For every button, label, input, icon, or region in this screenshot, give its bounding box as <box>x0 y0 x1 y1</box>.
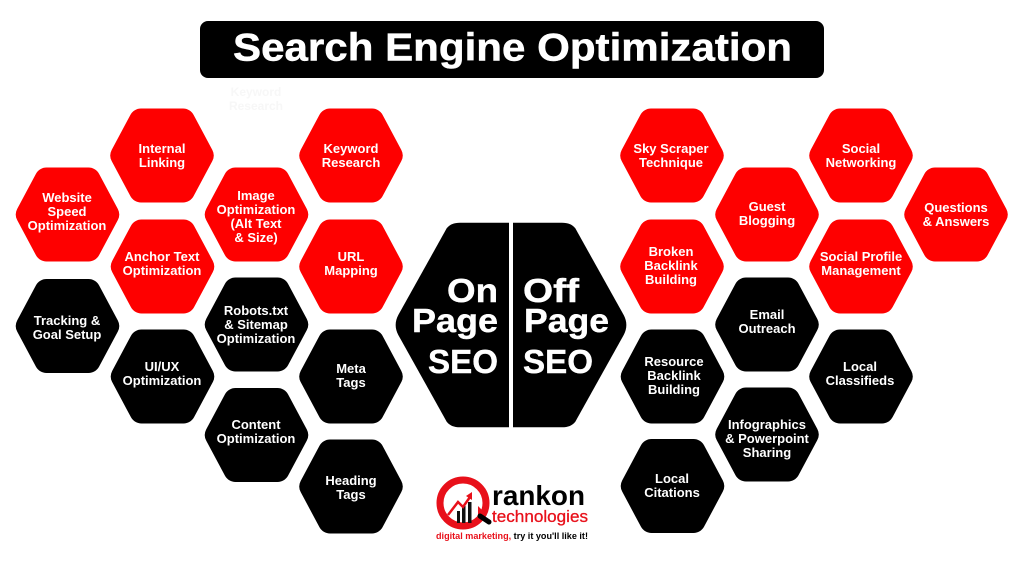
faint ghost text: Keyword <box>231 85 281 99</box>
hexagon: Questions & Answers: Questions <box>924 200 988 215</box>
title banner: Search Engine Optimization <box>233 26 792 70</box>
hexagon: Anchor Text Optimization <box>123 232 202 302</box>
hexagon: Social Networking: Networking <box>826 155 896 170</box>
center: Off Page SEO half hexagon <box>513 223 626 427</box>
hexagon: Meta Tags: Meta <box>336 361 367 376</box>
logo subtitle: technologies <box>492 508 588 526</box>
hexagon: Image Optimization: & Size) <box>234 230 278 245</box>
hexagon: Tracking & Goal Setup <box>28 291 107 361</box>
hexagon: Image Optimization: Image <box>237 188 275 203</box>
hexagon: Sky Scraper Technique <box>632 120 712 190</box>
center: On Page SEO half hexagon: Page <box>412 302 498 339</box>
hexagon: Infographics & Powerpoint Sharing: Sharing <box>743 445 791 460</box>
hexagon: Anchor Text Optimization: Optimization <box>123 263 201 278</box>
center: On Page SEO half hexagon: SEO <box>428 343 498 380</box>
hexagon: Social Profile Management <box>820 232 902 302</box>
center: On Page SEO half hexagon <box>396 223 509 427</box>
hexagon: Broken Backlink Building: Broken <box>649 244 693 259</box>
hexagon: UI/UX Optimization: Optimization <box>123 373 201 388</box>
hexagon: Resource Backlink Building <box>633 342 712 412</box>
hexagon: Guest Blogging <box>727 180 807 250</box>
hexagon: Social Profile Management: Management <box>821 263 901 278</box>
hexagon: Social Profile Management: Social Profile <box>820 249 902 264</box>
hexagon: Anchor Text Optimization: Anchor Text <box>125 249 200 264</box>
hexagon: Website Speed Optimization: Speed <box>47 204 87 219</box>
hexagon: Resource Backlink Building: Resource <box>644 354 704 369</box>
faint ghost text <box>229 85 283 113</box>
hexagon: Image Optimization: Optimization <box>217 202 295 217</box>
hexagon: Website Speed Optimization <box>28 180 107 250</box>
hexagon: Robots.txt & Sitemap Optimization <box>217 290 296 360</box>
hexagon: UI/UX Optimization <box>123 342 202 412</box>
center: On Page SEO half hexagon: On <box>447 272 498 309</box>
hexagon: Questions & Answers: & Answers <box>923 214 989 229</box>
center: Off Page SEO half hexagon: Page <box>524 302 609 339</box>
hexagon: Image Optimization <box>217 180 296 250</box>
hexagon: Meta Tags: Tags <box>336 375 366 390</box>
hexagon: Tracking & Goal Setup: Goal Setup <box>33 327 101 342</box>
hexagon: URL Mapping: Mapping <box>324 263 378 278</box>
hexagon: Keyword Research <box>311 120 391 190</box>
hexagon: Local Classifieds <box>821 342 901 412</box>
logo wordmark: rankon <box>492 480 585 511</box>
hexagon: Tracking & Goal Setup: Tracking & <box>34 313 100 328</box>
hexagon: Meta Tags <box>311 342 391 412</box>
hexagon: Content Optimization: Content <box>231 417 281 432</box>
hexagon: Local Classifieds: Classifieds <box>826 373 894 388</box>
hexagon: Internal Linking <box>122 120 202 190</box>
hexagon: Keyword Research: Research <box>322 155 380 170</box>
panel: off page SEO hexagons <box>632 120 996 521</box>
hexagon: Social Networking <box>821 120 901 190</box>
hexagon: Website Speed Optimization: Website <box>42 190 92 205</box>
hexagon: Robots.txt & Sitemap Optimization: & Sitemap <box>224 317 288 332</box>
hexagon: Email Outreach <box>727 290 807 360</box>
hexagon: Robots.txt & Sitemap Optimization: Optimization <box>217 331 295 346</box>
hexagon: Sky Scraper Technique: Technique <box>639 155 703 170</box>
hexagon: Questions & Answers <box>916 180 996 250</box>
icon: magnifier with chart <box>440 480 489 526</box>
hexagon: Local Classifieds: Local <box>843 359 877 374</box>
hexagon: Internal Linking: Linking <box>139 155 185 170</box>
faint ghost text: Research <box>229 99 283 113</box>
hexagon: Keyword Research: Keyword <box>324 141 379 156</box>
hexagon: URL Mapping <box>311 232 391 302</box>
hexagon: Content Optimization <box>217 400 296 470</box>
hexagon: Sky Scraper Technique: Sky Scraper <box>633 141 709 156</box>
hexagon: Email Outreach: Email <box>750 307 784 322</box>
hexagon: Local Citations <box>633 451 712 521</box>
hexagon: Robots.txt & Sitemap Optimization: Robots.txt <box>224 303 289 318</box>
hexagon: Infographics & Powerpoint Sharing: & Powerpoint <box>725 431 810 446</box>
hexagon: Resource Backlink Building: Building <box>648 382 700 397</box>
panel: on page SEO hexagons <box>28 120 391 522</box>
hexagon: Infographics & Powerpoint Sharing <box>725 400 810 470</box>
center: Off Page SEO half hexagon: Off <box>523 272 580 309</box>
tagline: digital marketing, try it you'll like it! <box>436 531 588 542</box>
hexagon: Email Outreach: Outreach <box>738 321 796 336</box>
hexagon: Guest Blogging: Guest <box>749 199 786 214</box>
hexagon: Guest Blogging: Blogging <box>739 213 795 228</box>
hexagon: Local Citations: Local <box>655 471 689 486</box>
hexagon: Heading Tags <box>311 452 391 522</box>
hexagon: UI/UX Optimization: UI/UX <box>145 359 180 374</box>
hexagon: Social Networking: Social <box>842 141 880 156</box>
hexagon: Local Citations: Citations <box>644 485 700 500</box>
hexagon: Broken Backlink Building: Backlink <box>644 258 699 273</box>
title banner <box>200 21 824 78</box>
logo: Rankon Technologies <box>436 480 588 542</box>
hexagon: Heading Tags: Heading <box>325 473 377 488</box>
hexagon: Broken Backlink Building <box>632 232 712 302</box>
hexagon: Internal Linking: Internal <box>139 141 185 156</box>
hexagon: Resource Backlink Building: Backlink <box>647 368 702 383</box>
hexagon: Website Speed Optimization: Optimization <box>28 218 106 233</box>
hexagon: Content Optimization: Optimization <box>217 431 295 446</box>
center: Off Page SEO half hexagon: SEO <box>523 343 593 380</box>
hexagon: Broken Backlink Building: Building <box>645 272 697 287</box>
hexagon: Image Optimization: (Alt Text <box>230 216 282 231</box>
hexagon: URL Mapping: URL <box>338 249 364 264</box>
hexagon: Infographics & Powerpoint Sharing: Infographics <box>728 417 806 432</box>
hexagon: Heading Tags: Tags <box>336 487 366 502</box>
